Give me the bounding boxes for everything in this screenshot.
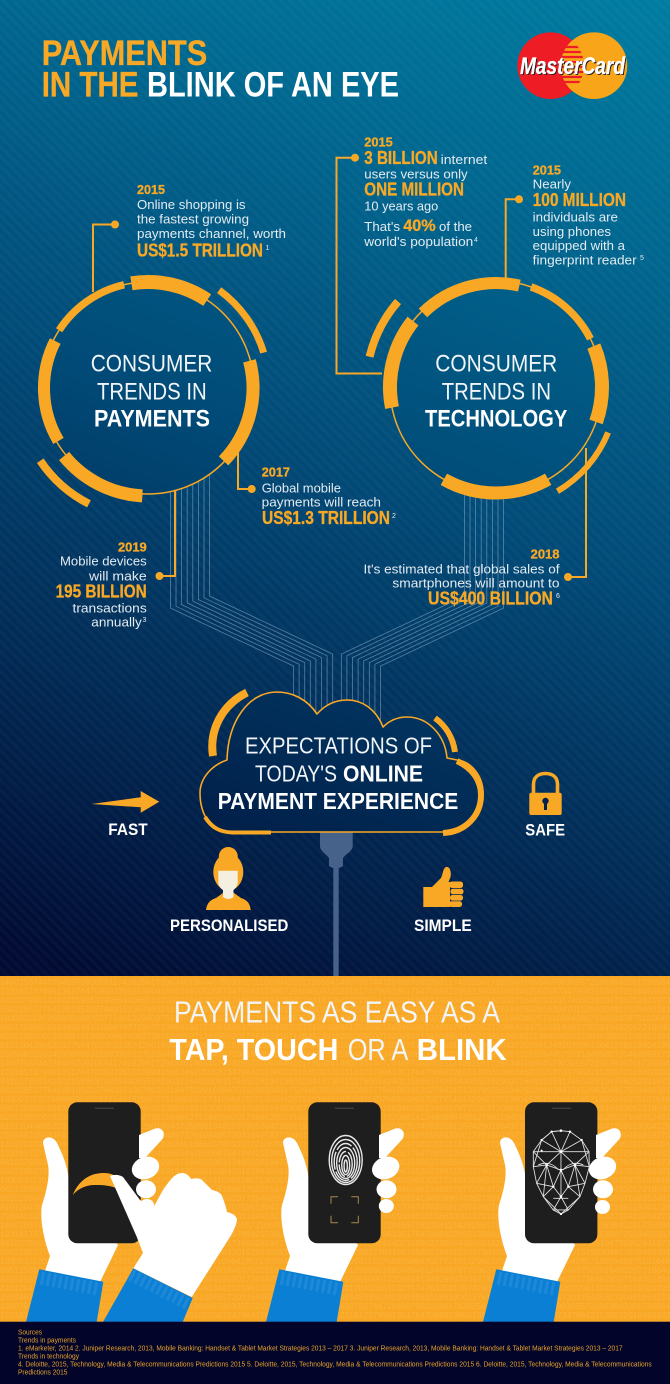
panel: consumer trends in payments ring xyxy=(0,213,323,563)
heading: payments as easy as a tap, touch or a blink: OR A xyxy=(348,1032,409,1067)
icon: fingerprint xyxy=(329,1136,362,1184)
callout: smartphone sales 2018: It's estimated that global sales of xyxy=(364,561,560,576)
icon: plug and cable xyxy=(320,832,353,977)
callout: smartphone sales 2018: 6 xyxy=(556,593,560,600)
callout: mobile transactions 2019 xyxy=(56,540,147,630)
sources: Trends in payments xyxy=(18,1336,76,1345)
logo: MasterCard xyxy=(517,32,627,99)
callout: mobile transactions 2019: annually xyxy=(91,615,142,630)
logo: MasterCard: MasterCard xyxy=(521,54,627,81)
callout: mobile payments 2017 xyxy=(262,465,396,528)
callout: mobile transactions 2019: transactions xyxy=(72,601,147,616)
callout: online shopping 2015: payments channel, worth xyxy=(137,226,286,241)
callout: fingerprint readers 2015: 100 MILLION xyxy=(533,190,626,210)
callout: internet users 2015: 2015 xyxy=(364,135,393,150)
callout: online shopping 2015: 2015 xyxy=(137,182,165,197)
heading: expectations of today's online payment experience: PAYMENT EXPERIENCE xyxy=(218,788,458,814)
callout: mobile transactions 2019: 3 xyxy=(142,617,146,624)
sources xyxy=(18,1328,652,1377)
icon: padlock xyxy=(529,774,562,815)
illustration: fingerprint phone and hand xyxy=(266,1102,404,1322)
heading: consumer trends in payments: PAYMENTS xyxy=(94,406,210,433)
icon: person xyxy=(206,847,251,910)
illustration: face recognition phone and hand xyxy=(483,1102,621,1322)
callout: mobile transactions 2019: Mobile devices xyxy=(60,554,147,569)
callout: internet users 2015: That's xyxy=(364,219,401,234)
heading: expectations of today's online payment experience: EXPECTATIONS OF xyxy=(245,732,432,758)
callout: online shopping 2015: 1 xyxy=(266,245,270,252)
label: safe: SAFE xyxy=(525,821,565,840)
panel: yellow band xyxy=(0,976,670,1322)
callout: internet users 2015 xyxy=(363,135,488,249)
sources: Predictions 2015 xyxy=(18,1368,68,1377)
heading: expectations of today's online payment experience xyxy=(218,732,458,814)
callout: mobile payments 2017: US$1.3 TRILLION xyxy=(262,508,390,528)
callout: smartphone sales 2018: 2018 xyxy=(531,546,560,561)
heading: consumer trends in technology: CONSUMER xyxy=(435,351,557,378)
heading: consumer trends in payments: TRENDS IN xyxy=(97,378,207,405)
callout: mobile transactions 2019: will make xyxy=(88,569,147,584)
heading: payments as easy as a tap, touch or a blink: PAYMENTS AS EASY AS A xyxy=(174,994,500,1029)
heading: consumer trends in technology xyxy=(425,351,567,433)
callout: mobile payments 2017: 2017 xyxy=(262,465,290,480)
callout: internet users 2015: world's population xyxy=(363,234,473,249)
panel: consumer trends in technology ring xyxy=(338,229,654,545)
sources: Sources xyxy=(18,1328,42,1337)
heading: payments as easy as a tap, touch or a blink: BLINK xyxy=(417,1032,507,1067)
callout: mobile transactions 2019: 2019 xyxy=(118,540,147,555)
callout: internet users 2015: users versus only xyxy=(364,167,468,182)
icon: thumbs up xyxy=(423,867,464,907)
footer panel xyxy=(0,1322,670,1384)
icon: face mesh xyxy=(533,1129,589,1215)
callout: fingerprint readers 2015: Nearly xyxy=(533,177,571,192)
title: BLINK OF AN EYE xyxy=(147,66,399,105)
callout: online shopping 2015: US$1.5 TRILLION xyxy=(137,241,263,261)
connector lines and dots xyxy=(93,154,586,581)
callout: internet users 2015: 40% xyxy=(403,216,436,235)
callout: online shopping 2015: the fastest growing xyxy=(137,212,249,226)
callout: fingerprint readers 2015: individuals are xyxy=(533,209,618,224)
circuit traces: right group xyxy=(341,470,504,730)
callout: internet users 2015: ONE MILLION xyxy=(364,180,464,200)
callout: mobile transactions 2019: 195 BILLION xyxy=(56,581,147,601)
label: simple: SIMPLE xyxy=(414,916,472,935)
callout: fingerprint readers 2015 xyxy=(533,163,644,267)
heading: consumer trends in payments xyxy=(91,351,212,433)
heading: expectations of today's online payment experience: ONLINE xyxy=(343,761,423,787)
callout: internet users 2015: 10 years ago xyxy=(364,198,438,213)
callout: mobile payments 2017: 2 xyxy=(392,513,396,520)
heading: consumer trends in technology: TECHNOLOGY xyxy=(425,406,567,433)
callout: smartphone sales 2018 xyxy=(364,546,560,608)
circuit traces: left group xyxy=(170,470,333,730)
callout: internet users 2015: of the xyxy=(439,219,472,234)
callout: mobile payments 2017: Global mobile xyxy=(262,480,341,495)
callout: internet users 2015: 3 BILLION xyxy=(364,148,438,168)
callout: mobile payments 2017: payments will reach xyxy=(262,495,381,510)
icon: arrow xyxy=(92,791,159,813)
heading: payments as easy as a tap, touch or a blink: TAP, TOUCH xyxy=(169,1032,338,1067)
callout: online shopping 2015: Online shopping is xyxy=(137,197,246,212)
background xyxy=(0,0,670,977)
heading: expectations of today's online payment experience: TODAY'S xyxy=(255,761,337,787)
callout: online shopping 2015 xyxy=(137,182,286,261)
callout: fingerprint readers 2015: 5 xyxy=(640,255,644,262)
panel: cloud xyxy=(200,692,483,833)
label: fast: FAST xyxy=(108,820,148,839)
illustration: tap phone and hands xyxy=(26,1102,237,1322)
title xyxy=(42,34,399,105)
callout: fingerprint readers 2015: using phones xyxy=(533,224,612,239)
callout: internet users 2015: internet xyxy=(441,152,488,167)
callout: fingerprint readers 2015: equipped with a xyxy=(533,238,626,253)
title: IN THE xyxy=(42,66,139,105)
callout: fingerprint readers 2015: fingerprint reader xyxy=(533,252,637,267)
heading: consumer trends in technology: TRENDS IN xyxy=(442,378,551,405)
title: PAYMENTS xyxy=(42,34,207,73)
sources: Trends in technology xyxy=(18,1352,79,1361)
heading: consumer trends in payments: CONSUMER xyxy=(91,351,212,378)
label: personalised: PERSONALISED xyxy=(170,916,288,935)
heading: payments as easy as a tap, touch or a blink xyxy=(169,994,507,1067)
callout: smartphone sales 2018: smartphones will amount to xyxy=(392,575,560,590)
callout: fingerprint readers 2015: 2015 xyxy=(533,163,561,178)
callout: smartphone sales 2018: US$400 BILLION xyxy=(428,588,553,608)
callout: internet users 2015: 4 xyxy=(474,237,478,244)
logo: MasterCard: MasterCard xyxy=(520,53,626,80)
